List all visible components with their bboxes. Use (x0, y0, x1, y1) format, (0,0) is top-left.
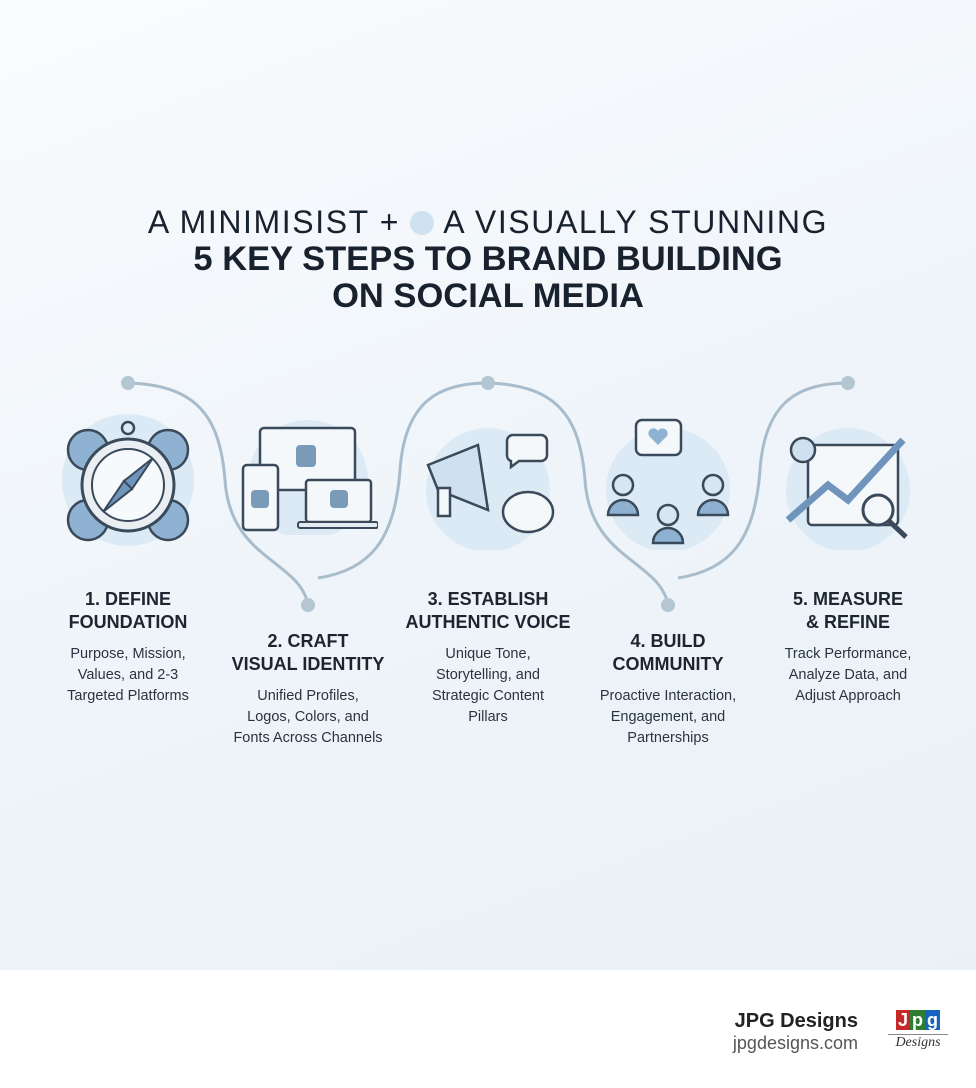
step 5 text: Track Performance, (785, 646, 911, 662)
step 1 text: Values, and 2-3 (78, 667, 178, 683)
icon: megaphone and brain (426, 428, 554, 550)
step 3 text: 3. ESTABLISH (428, 589, 548, 609)
step 4 text (600, 631, 736, 746)
brand text (732, 1010, 858, 1053)
step 4 text: Engagement, and (611, 709, 725, 725)
step 2 text: VISUAL IDENTITY (232, 654, 384, 674)
title: ON SOCIAL MEDIA (332, 277, 644, 315)
footer (0, 970, 976, 1088)
brand text: jpgdesigns.com (733, 1033, 858, 1053)
icon: growth chart (786, 428, 910, 550)
step 1 text: Purpose, Mission, (70, 646, 186, 662)
step 4 text: COMMUNITY (612, 654, 724, 674)
title: 5 KEY STEPS TO BRAND BUILDING (193, 240, 783, 278)
logo: Designs (895, 1035, 941, 1050)
step 5 text: & REFINE (806, 612, 890, 632)
step 4 text: Proactive Interaction, (600, 688, 736, 704)
step 1 text: FOUNDATION (69, 612, 187, 632)
icon: community (606, 418, 730, 550)
step 5 text: 5. MEASURE (793, 589, 903, 609)
step 5 text: Analyze Data, and (789, 667, 907, 683)
step 3 text (405, 589, 570, 725)
icon: devices (242, 420, 378, 535)
step 2 text: Logos, Colors, and (247, 709, 369, 725)
step 5 text (784, 589, 911, 704)
step 3 text: AUTHENTIC VOICE (405, 612, 570, 632)
step 4 text: Partnerships (627, 730, 709, 746)
step 2 text: Unified Profiles, (257, 688, 359, 704)
step 3 text: Storytelling, and (436, 667, 540, 683)
step 1 text: 1. DEFINE (85, 589, 171, 609)
title (148, 204, 828, 315)
logo: Jpg (898, 1010, 938, 1030)
step 2 text (232, 631, 384, 746)
brand text: JPG Designs (735, 1010, 858, 1032)
step 2 text: Fonts Across Channels (233, 730, 383, 746)
step 3 text: Unique Tone, (445, 646, 531, 662)
step 1 text (67, 589, 189, 704)
step 5 text: Adjust Approach (795, 688, 901, 704)
step 3 text: Pillars (468, 709, 508, 725)
step 2 text: 2. CRAFT (268, 631, 348, 651)
step 3 text: Strategic Content (432, 688, 544, 704)
icon: compass with social icons (62, 414, 194, 546)
step 4 text: 4. BUILD (630, 631, 706, 651)
title: A MINIMISIST + A VISUALLY STUNNING (148, 204, 828, 240)
logo (888, 1010, 948, 1050)
step 1 text: Targeted Platforms (67, 688, 189, 704)
